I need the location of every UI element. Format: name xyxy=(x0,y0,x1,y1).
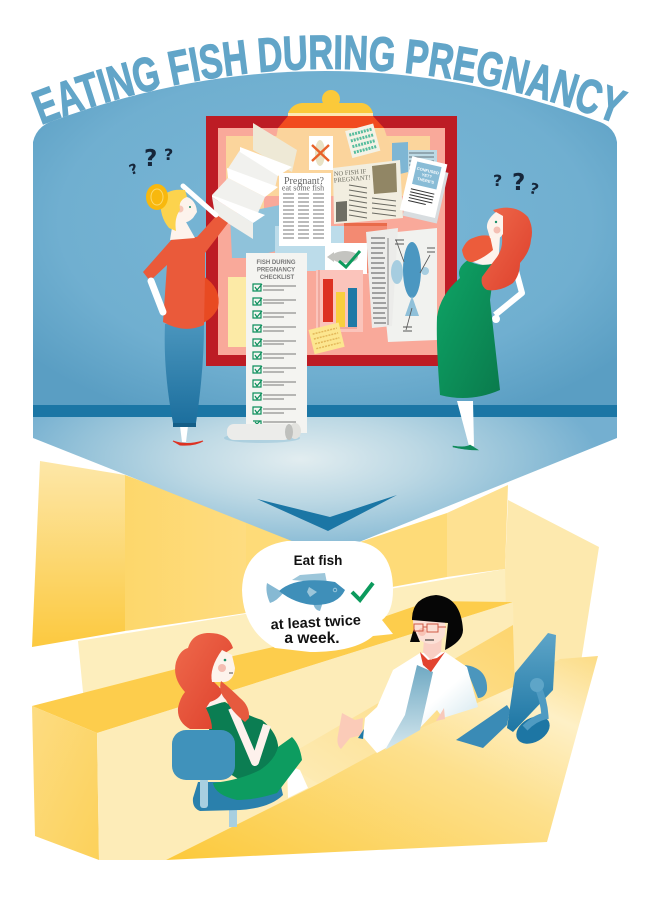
stand base xyxy=(511,711,555,749)
mouth xyxy=(425,639,434,641)
dress xyxy=(437,260,500,398)
left lock xyxy=(462,235,493,262)
wall xyxy=(33,71,617,405)
neck xyxy=(205,685,229,708)
clip xyxy=(288,103,373,113)
sticky note xyxy=(309,322,345,354)
left box side xyxy=(32,706,99,860)
wall stripe xyxy=(33,405,617,417)
check mark xyxy=(352,583,373,600)
neck xyxy=(423,636,442,660)
coat xyxy=(363,652,478,753)
question marks left xyxy=(127,145,173,179)
brochure xyxy=(399,156,450,224)
question marks right: ? xyxy=(512,170,525,196)
screen xyxy=(507,633,556,732)
forearm raised xyxy=(183,186,216,215)
panel: yellow office room xyxy=(32,461,599,860)
orange table sheet xyxy=(344,223,387,273)
upper post xyxy=(200,778,208,808)
newspaper: pregnant eat some fish: Pregnant? xyxy=(284,176,325,187)
bubble text top: Eat fish xyxy=(294,553,342,568)
panel: blue room xyxy=(33,71,617,555)
clip light beam xyxy=(278,116,384,128)
question marks left: ? xyxy=(164,145,173,164)
keyboard xyxy=(456,705,510,748)
skirt xyxy=(213,737,302,800)
green stamps note xyxy=(345,124,380,158)
question marks right: ? xyxy=(493,171,502,190)
torso xyxy=(205,702,278,780)
belly xyxy=(200,276,219,324)
glasses xyxy=(414,624,446,632)
check card xyxy=(325,243,367,274)
speech bubble xyxy=(242,541,393,652)
sweater xyxy=(143,215,228,329)
newspaper: no fish if pregnant xyxy=(333,160,403,224)
question marks right: ? xyxy=(528,179,541,199)
speech bubble: a week. xyxy=(284,630,340,647)
figure: standing woman with red hair xyxy=(437,208,532,450)
bun xyxy=(146,184,168,210)
arm xyxy=(232,708,267,762)
newspaper: no fish if pregnant: NO FISH IF xyxy=(334,168,367,178)
question marks left: ? xyxy=(127,161,140,179)
neck and face xyxy=(170,215,195,240)
hair xyxy=(161,190,187,231)
front lock xyxy=(220,681,249,722)
face xyxy=(211,650,235,682)
right wall xyxy=(505,500,599,700)
floor xyxy=(33,417,617,555)
arm xyxy=(495,267,522,315)
collar xyxy=(420,652,445,672)
title: EATING FISH DURING PREGNANCY xyxy=(31,35,629,125)
seat xyxy=(193,782,283,811)
chevron arrow xyxy=(257,495,397,531)
legs and shoes xyxy=(180,426,188,442)
checklist: FISH DURING xyxy=(256,260,296,266)
jeans xyxy=(165,324,204,423)
checklist: PREGNANCY xyxy=(257,268,295,274)
leg xyxy=(457,401,474,446)
checklist roll xyxy=(224,423,301,443)
computer xyxy=(456,633,556,749)
neck xyxy=(473,236,500,270)
brochure: YET? xyxy=(421,172,433,179)
newspaper: no fish if pregnant: PREGNANT! xyxy=(334,174,371,184)
figure: doctor xyxy=(337,595,487,753)
fish diagram sheet xyxy=(366,228,437,342)
question marks right xyxy=(493,170,541,199)
fish icon xyxy=(266,573,345,611)
figure: seated woman xyxy=(172,633,308,827)
chair back xyxy=(172,730,235,780)
hand xyxy=(337,713,363,749)
legs xyxy=(287,765,308,798)
tie strip xyxy=(385,665,433,750)
card: crossed fish xyxy=(309,136,333,170)
lower post xyxy=(229,805,237,827)
chair back xyxy=(465,665,487,698)
checklist: CHECKLIST xyxy=(260,275,294,281)
question marks left: ? xyxy=(144,146,157,172)
newspaper: pregnant eat some fish xyxy=(279,173,331,246)
hair xyxy=(482,208,532,290)
bubble text lower: at least twice xyxy=(270,613,361,633)
brochure: THERE'S xyxy=(417,176,435,185)
desk xyxy=(166,656,598,860)
face xyxy=(413,620,445,644)
box front xyxy=(97,602,515,860)
panel: noticeboard xyxy=(206,90,457,366)
clip knob xyxy=(322,90,340,108)
blue sheets xyxy=(392,142,408,176)
brochure: CONFUSED xyxy=(416,166,439,176)
inner hand xyxy=(436,708,445,721)
folded paper xyxy=(212,123,297,239)
face xyxy=(487,212,503,239)
checklist xyxy=(246,253,307,433)
figure: woman with blonde hair xyxy=(143,184,228,445)
golden shelf band xyxy=(32,601,513,733)
hair xyxy=(175,633,233,729)
back wall left xyxy=(32,461,125,647)
shoe xyxy=(453,445,478,450)
pale back band xyxy=(78,569,515,735)
forearm low xyxy=(151,281,163,312)
bar chart xyxy=(316,270,363,332)
hair xyxy=(412,595,463,650)
stand arm xyxy=(525,685,545,728)
newspaper: pregnant eat some fish: eat some fish xyxy=(282,184,324,192)
